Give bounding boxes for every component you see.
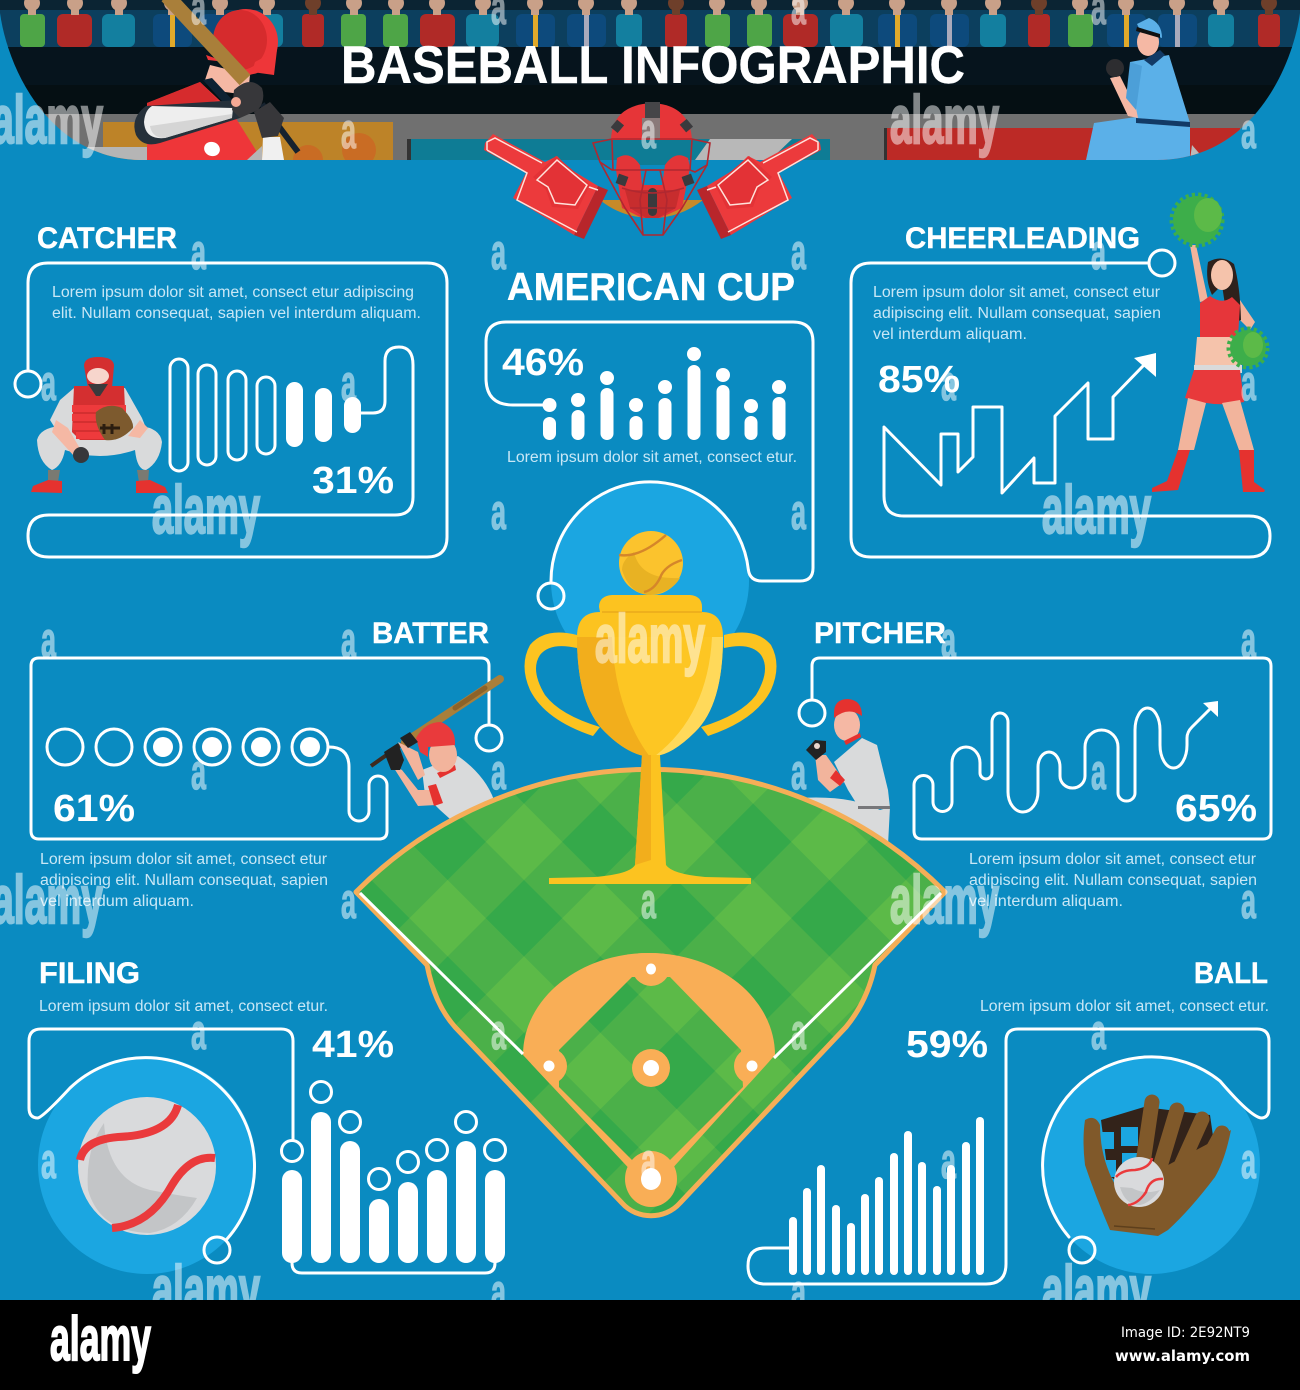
trophy stem and base [549, 755, 751, 884]
value: ball: 59% [906, 1024, 988, 1066]
infield grass [559, 977, 743, 1160]
watermark tiles: a [1091, 1004, 1107, 1060]
panel: filing [29, 957, 506, 1274]
blue disc: filing [38, 1056, 256, 1274]
heading: filing: FILING [39, 957, 140, 990]
panel: catcher [15, 222, 447, 557]
header stadium banner [0, 0, 1300, 175]
watermark tiles: a [191, 744, 207, 800]
watermark tiles: alamy [595, 601, 705, 677]
marker: batter [476, 725, 502, 751]
heading: ball: BALL [1194, 957, 1268, 990]
footer url: www.alamy.com [1115, 1347, 1250, 1365]
heading: batter: BATTER [372, 617, 489, 650]
icon: foam finger left [484, 134, 608, 239]
icon: foam finger right [697, 134, 821, 239]
watermark tiles: alamy [890, 862, 999, 938]
bars: filing [282, 1082, 506, 1273]
watermark tiles: a [941, 612, 957, 668]
watermark tiles: a [341, 355, 357, 411]
text: american cup: Lorem ipsum dolor sit amet, consect etur. [507, 449, 797, 466]
panel: ball [748, 957, 1269, 1284]
figure: batter player [371, 679, 500, 828]
pitcher in header [1086, 18, 1205, 160]
watermark tiles: a [791, 1004, 807, 1060]
figure: cheerleader [1152, 196, 1266, 492]
infield dirt [523, 953, 775, 1192]
watermark tiles: alamy [152, 472, 260, 548]
icon: catcher mask [593, 102, 710, 235]
figure: catcher player [31, 357, 168, 493]
heading: cheerleading: CHEERLEADING [905, 222, 1140, 255]
marker: cheerleading [1149, 250, 1175, 276]
text: pitcher: adipiscing elit. Nullam consequat, sapien [969, 872, 1257, 889]
watermark tiles: a [791, 224, 807, 280]
blue circle behind trophy [551, 482, 749, 680]
watermark tiles: a [491, 744, 507, 800]
footer bar [0, 1300, 1300, 1390]
icon: baseball [78, 1097, 216, 1235]
text: cheerleading: vel interdum aliquam. [873, 326, 1027, 343]
text: ball: Lorem ipsum dolor sit amet, consect etur. [980, 998, 1269, 1015]
watermark tiles: a [491, 224, 507, 280]
text: pitcher: Lorem ipsum dolor sit amet, consect etur [969, 851, 1256, 868]
crowd [20, 0, 1280, 47]
trophy and ball [524, 531, 776, 884]
text: cheerleading: Lorem ipsum dolor sit amet, consect etur [873, 284, 1160, 301]
outline: cheerleading [851, 263, 1270, 557]
panel: batter [31, 617, 502, 910]
watermark tiles: alamy [152, 1252, 260, 1328]
marker: pitcher [799, 700, 825, 726]
blue disc: ball [1042, 1056, 1260, 1274]
batter in header [134, 0, 298, 160]
watermark tiles: a [641, 873, 657, 929]
watermark tiles: alamy [890, 82, 999, 158]
text: cheerleading [873, 284, 1161, 343]
text: pitcher [969, 851, 1257, 910]
arrow head: pitcher [1203, 701, 1218, 717]
watermark tiles: a [941, 355, 957, 411]
watermark tiles: a [191, 224, 207, 280]
watermark tiles: a [491, 1264, 507, 1320]
trophy lid [577, 595, 723, 637]
watermark tiles: a [941, 1133, 957, 1189]
watermark tiles: a [1241, 873, 1257, 929]
heading: pitcher: PITCHER [814, 617, 946, 650]
rating dots: batter [47, 729, 328, 765]
foul lines [360, 893, 941, 1058]
trophy cup [577, 637, 723, 757]
watermark tiles: a [1241, 1133, 1257, 1189]
panel: cheerleading [851, 196, 1270, 557]
text: catcher [52, 284, 421, 322]
text: batter: vel interdum aliquam. [40, 893, 194, 910]
watermark tiles: a [41, 612, 57, 668]
value: pitcher: 65% [1175, 788, 1257, 830]
watermark tiles: a [1241, 103, 1257, 159]
title: BASEBALL INFOGRAPHIC [341, 36, 965, 95]
baseball field [356, 769, 945, 1216]
orange semi ellipse behind mask [600, 200, 703, 218]
value: american cup: 46% [502, 342, 584, 384]
marker: american cup [538, 583, 564, 609]
bars: american cup [542, 347, 786, 440]
text: batter [40, 851, 328, 910]
watermark tiles: a [1241, 612, 1257, 668]
text: batter: Lorem ipsum dolor sit amet, consect etur [40, 851, 327, 868]
text: pitcher: vel interdum aliquam. [969, 893, 1123, 910]
bases [531, 948, 770, 1207]
watermark tiles: a [791, 1264, 807, 1320]
footer logo: alamy [50, 1305, 151, 1374]
watermark tiles: a [341, 612, 357, 668]
outline: american cup [486, 322, 813, 583]
watermark tiles: alamy [1042, 472, 1151, 548]
text: batter: adipiscing elit. Nullam consequat, sapien [40, 872, 328, 889]
watermark tiles: a [491, 484, 507, 540]
watermark tiles: a [641, 1133, 657, 1189]
value: cheerleading: 85% [878, 359, 960, 401]
marker: filing [204, 1237, 230, 1263]
watermark tiles: a [341, 1133, 357, 1189]
marker: ball [1069, 1237, 1095, 1263]
watermark tiles: a [791, 484, 807, 540]
watermark tiles: a [1241, 355, 1257, 411]
watermark tiles: a [191, 1004, 207, 1060]
bar gauge: catcher [170, 359, 361, 471]
watermark tiles: a [341, 873, 357, 929]
value: filing: 41% [312, 1024, 394, 1066]
panel: pitcher [799, 617, 1271, 910]
figure: pitcher player [800, 699, 890, 845]
watermark tiles: a [641, 103, 657, 159]
heading: american cup: AMERICAN CUP [507, 266, 795, 309]
arrow head: cheerleading [1134, 353, 1156, 377]
outline: filing [29, 1029, 293, 1239]
icon: yellow ball [619, 531, 683, 595]
panel: american cup [486, 266, 813, 609]
outline: pitcher [812, 658, 1271, 839]
watermark tiles: a [41, 355, 57, 411]
watermark tiles: alamy [1042, 1252, 1151, 1328]
watermark tiles: a [341, 103, 357, 159]
watermark tiles: a [791, 744, 807, 800]
bars: ball [789, 1117, 984, 1275]
trophy handles [524, 633, 776, 736]
text: catcher: Lorem ipsum dolor sit amet, consect etur adipiscing [52, 284, 414, 301]
outline: batter [31, 658, 489, 839]
text: cheerleading: adipiscing elit. Nullam consequat, sapien [873, 305, 1161, 322]
watermark tiles: a [1091, 224, 1107, 280]
watermark tiles: a [491, 1004, 507, 1060]
marker: catcher [15, 371, 41, 397]
icon: glove [1084, 1102, 1231, 1236]
outline: catcher [28, 263, 447, 557]
outline: ball [748, 1029, 1269, 1284]
value: catcher: 31% [312, 460, 394, 502]
heading: catcher: CATCHER [37, 222, 177, 255]
value: batter: 61% [53, 788, 135, 830]
footer image id: Image ID: 2E92NT9 [1121, 1325, 1250, 1341]
text: catcher: elit. Nullam consequat, sapien vel interdum aliquam. [52, 305, 421, 322]
text: filing: Lorem ipsum dolor sit amet, consect etur. [39, 998, 328, 1015]
watermark tiles: a [41, 1133, 57, 1189]
watermark tiles: a [1091, 744, 1107, 800]
